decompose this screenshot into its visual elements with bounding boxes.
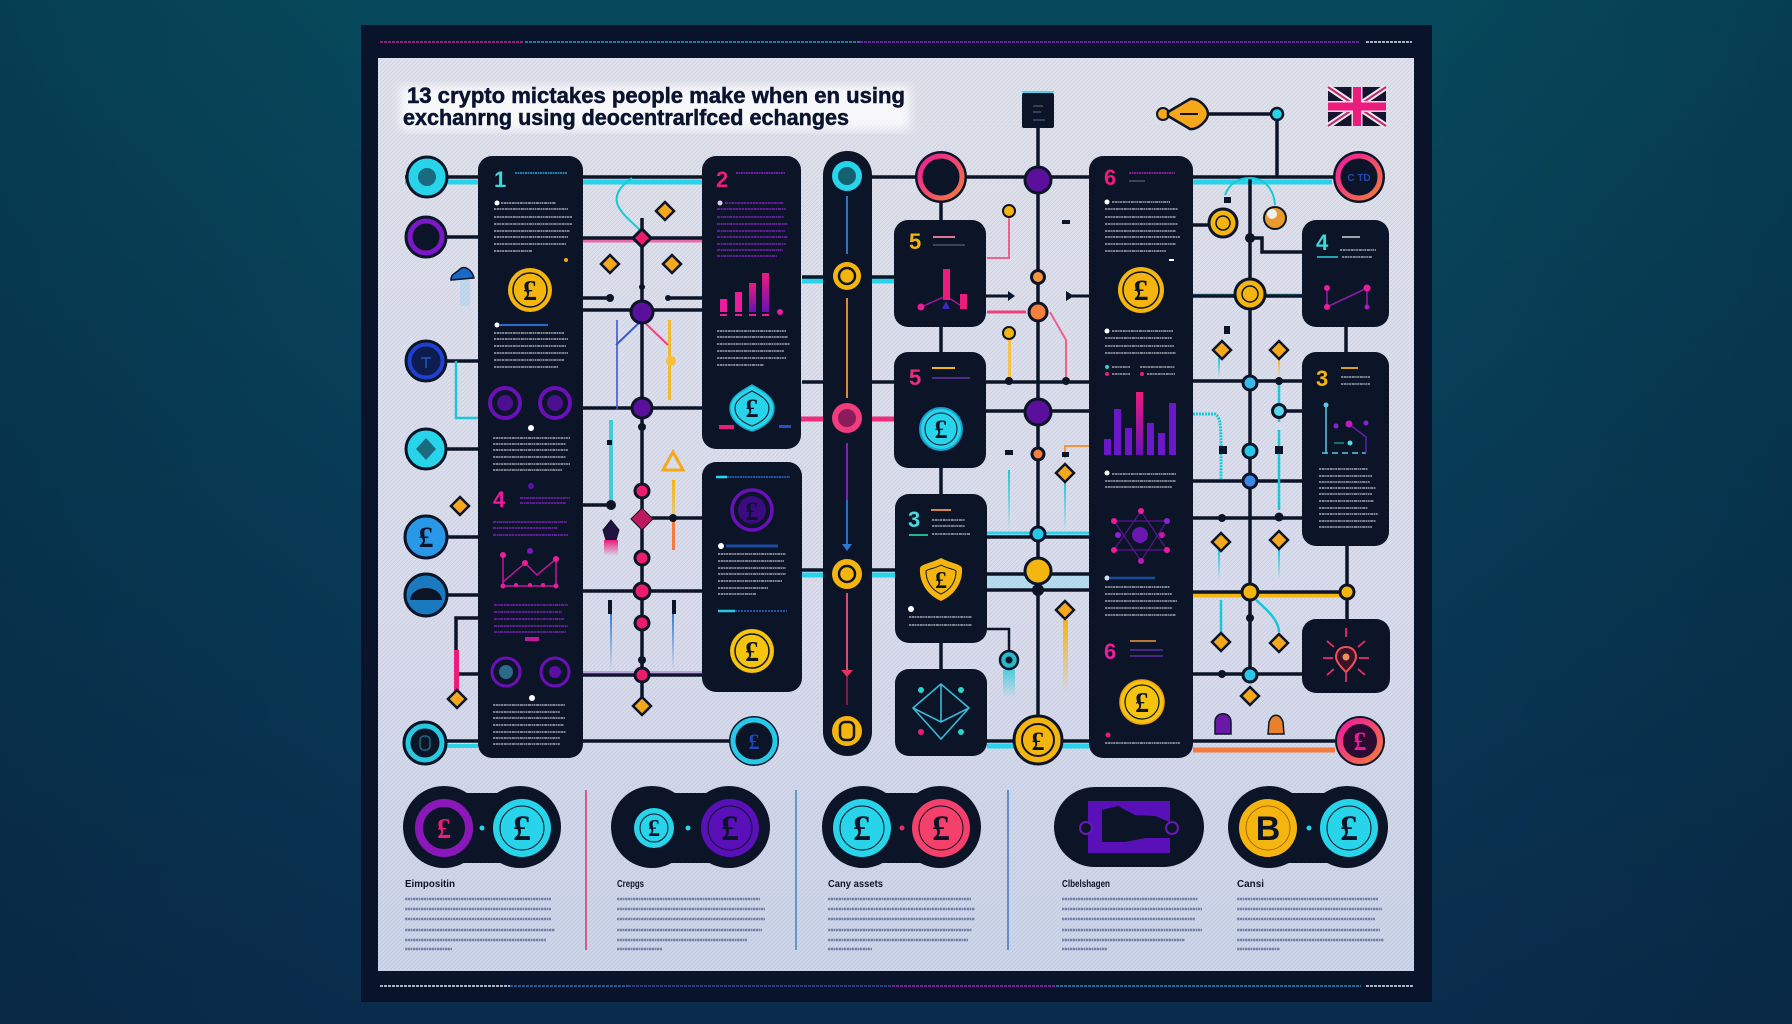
panel: card 1 <box>478 156 583 758</box>
bottom decorative strip <box>380 985 1414 987</box>
coin: gold pound: £ <box>523 276 537 307</box>
panel: card 4 right <box>1302 220 1389 327</box>
small black junction dots <box>606 233 1284 678</box>
node: cyan <box>832 161 862 191</box>
node: pink <box>832 403 862 433</box>
icon: dark diamond <box>603 520 619 540</box>
teal wires <box>456 178 1279 640</box>
small fading accents <box>454 218 1280 698</box>
circle: cyan <box>404 722 446 764</box>
bottom pill 1: £ <box>437 814 451 845</box>
panel: card 3 right <box>1302 352 1389 546</box>
panel: card 5 <box>894 220 986 327</box>
coin: gold: £ <box>745 637 759 668</box>
circle: blue <box>406 341 446 381</box>
shield: gold: £ <box>935 568 947 594</box>
panel: card 1: 4 <box>493 487 506 512</box>
footer column 5 <box>1237 879 1384 949</box>
legend <box>1105 365 1175 376</box>
title: exchanrng using deocentrarlfced echanges <box>403 105 849 130</box>
coin: gold big right <box>1235 279 1265 309</box>
coin: gold center <box>1014 716 1062 764</box>
panel: card 3 right: 3 <box>1316 366 1328 391</box>
node: gold <box>832 716 862 746</box>
bottom pill 2 <box>611 786 770 868</box>
panel: card 2 <box>702 156 801 449</box>
panel: diamond icon card <box>895 669 987 756</box>
footer column 3: Cany assets <box>828 879 883 890</box>
coins: lower pair <box>492 658 569 686</box>
coin: gold <box>1120 680 1164 724</box>
circle: bottom right pound <box>1335 716 1385 766</box>
footer column 3 <box>828 879 975 949</box>
footer column 1 <box>405 879 555 949</box>
coin: gold <box>1118 267 1164 313</box>
bottom pill 1: £ <box>513 808 531 848</box>
coin: gold <box>730 629 774 673</box>
icon: warning triangle <box>663 452 683 470</box>
panel: card 2 lower <box>702 462 802 692</box>
colored connector bands <box>405 182 1347 750</box>
circle: cyan lower center <box>729 716 779 766</box>
gold flower <box>666 356 676 366</box>
circle: top right ring: C TD <box>1347 173 1371 184</box>
line chart <box>500 548 559 588</box>
circle: dark blue <box>405 574 447 616</box>
purple badge <box>1215 714 1231 734</box>
panel: card 5 lower <box>894 352 986 468</box>
coin: purple: £ <box>746 497 758 526</box>
orange badge <box>1268 715 1284 734</box>
panel: card 4 right: 4 <box>1316 230 1329 255</box>
pin marker <box>1264 207 1286 229</box>
small icons on wires <box>451 205 1286 764</box>
footer column 2: Crepgs <box>617 879 644 890</box>
coin: gold center: £ <box>1032 727 1044 756</box>
panel: card 5: 5 <box>909 229 921 254</box>
bottom pill 2: £ <box>721 808 739 848</box>
coin: purple <box>732 490 772 530</box>
center column nodes <box>631 167 1354 682</box>
shield: gold <box>920 558 962 601</box>
panel: card 2: 2 <box>716 167 728 192</box>
panel: card 6: 6 <box>1104 639 1116 664</box>
node: gold <box>833 262 861 290</box>
panel: card 6 <box>1089 156 1193 758</box>
circle: top center ring <box>915 151 967 203</box>
circle: bottom right pound: £ <box>1354 727 1366 756</box>
circle: cyan lower center: £ <box>748 729 760 754</box>
bar chart <box>1104 392 1176 455</box>
circle: cyan <box>406 429 446 469</box>
left column circles <box>404 157 447 764</box>
top device box <box>1022 92 1054 128</box>
node: gold <box>832 559 862 589</box>
icon: gold bulb pointer <box>1157 99 1208 129</box>
footer column 2 <box>617 879 765 949</box>
panel: card 1: 1 <box>494 167 506 192</box>
panel: card 6: 6 <box>1104 165 1116 190</box>
bottom pill 3: £ <box>932 808 950 848</box>
footer column 4 <box>1062 879 1202 949</box>
icon: union flag <box>1328 87 1386 126</box>
coin: gold: £ <box>1135 688 1149 719</box>
panel: card 3: 3 <box>908 507 920 532</box>
icon: cloud <box>451 268 474 280</box>
pink dotted tail <box>604 540 618 556</box>
coins: purple pair <box>490 388 570 418</box>
title <box>400 83 910 130</box>
network icon <box>1111 508 1170 564</box>
coin: gold on wire <box>1003 205 1015 339</box>
bar chart <box>720 273 783 316</box>
footer column 5: Cansi <box>1237 879 1264 890</box>
bottom pill 3 <box>822 786 981 868</box>
arrow tips <box>1008 291 1089 301</box>
coin: gold pound <box>508 268 552 312</box>
circle: blue pound <box>405 516 447 558</box>
panel: tall pill timeline <box>823 151 872 756</box>
circle: cyan <box>407 157 447 197</box>
top decorative strip <box>380 41 1412 43</box>
network wires <box>405 114 1347 741</box>
footer column 1: Eimpositin <box>405 879 455 890</box>
coin: cyan: £ <box>934 415 948 444</box>
bottom pill 4 <box>1054 787 1204 867</box>
paper panel <box>378 58 1414 971</box>
teal node <box>1000 651 1018 669</box>
circle: top right ring <box>1333 151 1385 203</box>
bottom pill 5: £ <box>1340 808 1358 848</box>
bottom pill 1 <box>403 786 561 868</box>
coin: gold upper right <box>1209 209 1237 237</box>
bottom pill 3: £ <box>853 808 871 848</box>
bottom pill 5: B <box>1256 810 1280 848</box>
scatter chart <box>1322 402 1368 453</box>
coin: gold: £ <box>1134 274 1148 307</box>
bottom pill 2: £ <box>648 816 660 842</box>
title: 13 crypto mictakes people make when en using <box>407 83 905 108</box>
panel: lightbulb card <box>1302 619 1390 693</box>
coin: cyan shield: £ <box>746 394 758 423</box>
chart <box>918 269 967 310</box>
line chart <box>1324 284 1370 310</box>
node: cyan <box>1271 108 1283 120</box>
dividers <box>586 790 1008 950</box>
circle: blue pound: £ <box>418 521 434 554</box>
small gold diamonds <box>448 202 1288 715</box>
coin: cyan shield <box>730 385 774 431</box>
dark frame <box>361 25 1432 1002</box>
footer column 4: Clbelshagen <box>1062 879 1110 890</box>
bottom pill 5 <box>1228 786 1388 868</box>
circle: purple <box>406 217 446 257</box>
small dashes <box>607 197 1283 614</box>
panel: card 3 <box>895 494 987 643</box>
panel: card 5 lower: 5 <box>909 365 921 390</box>
